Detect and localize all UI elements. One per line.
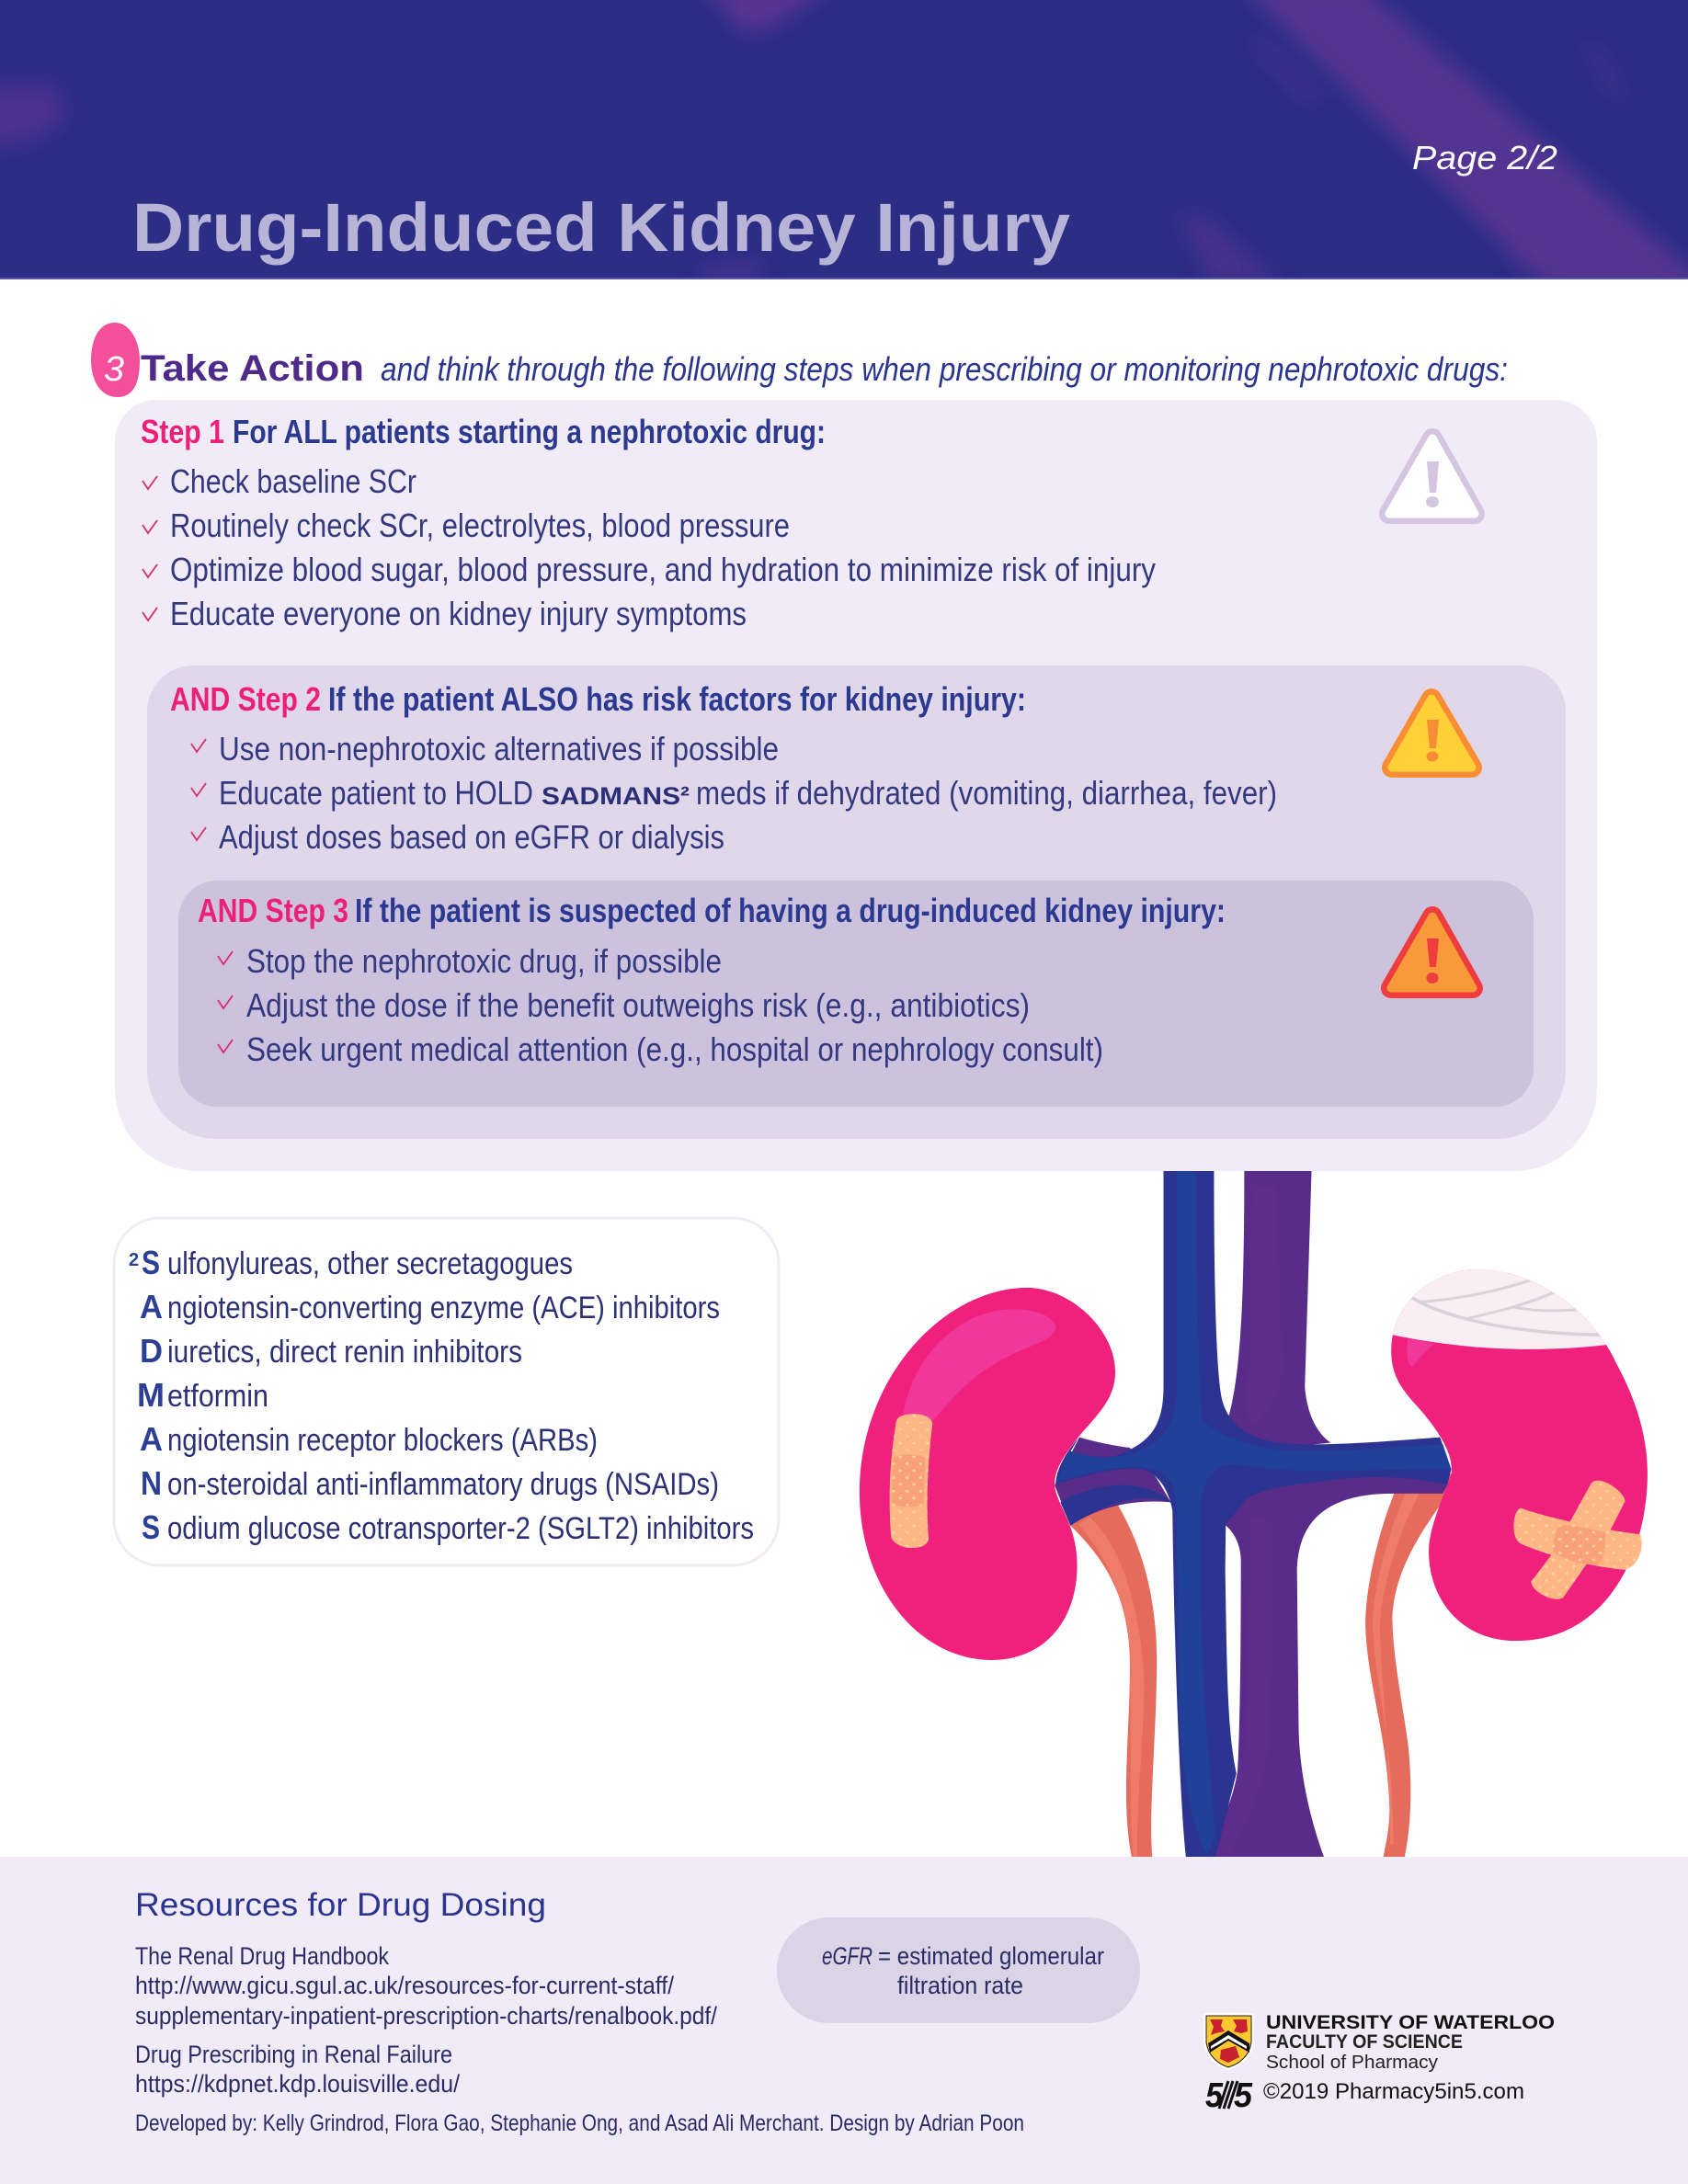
credits: Developed by: Kelly Grindrod, Flora Gao, Stephanie Ong, and Asad Ali Merchant. Design by Adrian Poon: [135, 2110, 1024, 2136]
left kidney: [860, 1288, 1115, 1660]
heading subtitle: and think through the following steps when prescribing or monitoring nephrotoxic drugs:: [381, 350, 1508, 388]
icon: warning yellow: [1392, 699, 1472, 768]
step 2 checklist: Adjust doses based on eGFR or dialysis: [219, 818, 724, 856]
legend line: NSAIDs: on-steroidal anti-inflammatory drugs (NSAIDs): [167, 1467, 719, 1502]
step 3 heading: If the patient is suspected of having a drug-induced kidney injury:: [355, 892, 1226, 929]
resource: drug prescribing: Drug Prescribing in Renal Failure: [135, 2041, 452, 2068]
callout: eGFR definition: [777, 1917, 1140, 2023]
legend line: sulfonylureas: S: [142, 1244, 160, 1281]
logo: pharmacy 5in5: ©2019 Pharmacy5in5.com: [1263, 2079, 1524, 2104]
legend line: ACE inhibitors: A: [140, 1288, 163, 1325]
bandage: left kidney: [890, 1414, 932, 1548]
step 1 checklist: Optimize blood sugar, blood pressure, and hydration to minimize risk of injury: [170, 551, 1156, 588]
logo: university of waterloo: UNIVERSITY OF WATERLOO: [1266, 2012, 1555, 2033]
step 2 checklist: meds if dehydrated (vomiting, diarrhea, fever): [696, 774, 1277, 812]
legend line: sulfonylureas: 2: [129, 1250, 139, 1270]
logo: pharmacy 5in5: 5: [1234, 2076, 1253, 2115]
icon: warning light: [1389, 438, 1475, 514]
logo: university of waterloo: FACULTY OF SCIENCE: [1266, 2031, 1463, 2053]
resource: renal drug handbook: The Renal Drug Handbook: [135, 1942, 389, 1970]
legend line: sulfonylureas: ulfonylureas, other secretagogues: [167, 1246, 573, 1281]
number badge: [91, 323, 140, 397]
logo: university of waterloo: [1203, 2012, 1555, 2073]
gauze wrap: [1393, 1269, 1606, 1349]
arteries: [1055, 1171, 1447, 1857]
panel: step 2: [147, 665, 1566, 1139]
legend line: metformin: etformin: [167, 1379, 268, 1414]
step 2 checklist: [191, 730, 1277, 856]
step 1 heading: Step 1: [141, 413, 224, 450]
step 2 heading: AND Step 2: [170, 680, 321, 718]
section heading: take action: [91, 323, 1508, 397]
legend line: ARBs: A: [140, 1420, 163, 1458]
header banner: [0, 0, 1688, 294]
step 3 checklist: Stop the nephrotoxic drug, if possible: [246, 942, 722, 980]
resource: drug prescribing: [135, 2041, 460, 2098]
legend line: metformin: [137, 1376, 268, 1414]
panel: step 3: [178, 881, 1534, 1107]
panel: step 1: [115, 400, 1597, 1171]
page number: Page 2/2: [1412, 139, 1557, 176]
footer panel: [0, 1857, 1688, 2184]
resource: renal drug handbook: supplementary-inpatient-prescription-charts/renalbook.pdf/: [135, 2002, 717, 2030]
callout: eGFR definition: filtration rate: [897, 1972, 1023, 1999]
resource: renal drug handbook: [135, 1942, 717, 2030]
veins: [1055, 1171, 1451, 1857]
legend line: metformin: M: [137, 1376, 165, 1414]
kidney illustration: [860, 1171, 1648, 1857]
step 2 checklist: SADMANS²: [542, 782, 690, 810]
legend line: diuretics: iuretics, direct renin inhibitors: [167, 1335, 522, 1370]
resource: drug prescribing: https://kdpnet.kdp.louisville.edu/: [135, 2070, 460, 2098]
legend line: NSAIDs: N: [141, 1464, 162, 1502]
bandage cross: right kidney: [1513, 1481, 1642, 1599]
legend line: diuretics: D: [140, 1332, 163, 1370]
step 1 checklist: Educate everyone on kidney injury symptoms: [170, 595, 747, 632]
icon: warning red: [1391, 916, 1473, 988]
step 2 checklist: Educate patient to HOLD: [219, 774, 533, 812]
callout: eGFR definition: = estimated glomerular: [878, 1942, 1104, 1970]
logo: university of waterloo: School of Pharmacy: [1266, 2053, 1438, 2073]
step 2 checklist: Use non-nephrotoxic alternatives if possible: [219, 730, 779, 768]
resources heading: Resources for Drug Dosing: [135, 1887, 546, 1923]
ureters: [1070, 1473, 1451, 1857]
legend line: ACE inhibitors: ngiotensin-converting enzyme (ACE) inhibitors: [167, 1291, 720, 1325]
logo: pharmacy 5in5: 5: [1205, 2076, 1224, 2115]
right kidney: [1391, 1269, 1648, 1642]
logo: pharmacy 5in5: [1205, 2076, 1524, 2115]
step 3 checklist: Seek urgent medical attention (e.g., hospital or nephrology consult): [246, 1030, 1103, 1068]
step 1 heading: For ALL patients starting a nephrotoxic drug:: [233, 413, 826, 450]
icon: shield: [1203, 2013, 1254, 2070]
step 3 checklist: [218, 942, 1103, 1068]
step 3 heading: AND Step 3: [198, 892, 348, 929]
step 2 heading: If the patient ALSO has risk factors for kidney injury:: [328, 680, 1026, 718]
legend line: SGLT2: S: [142, 1508, 160, 1546]
step 1 checklist: [143, 462, 1156, 632]
step 3 checklist: Adjust the dose if the benefit outweighs risk (e.g., antibiotics): [246, 986, 1030, 1024]
heading text: Take Action: [141, 348, 364, 389]
legend line: SGLT2: odium glucose cotransporter-2 (SGLT2) inhibitors: [167, 1511, 754, 1546]
step 1 checklist: Routinely check SCr, electrolytes, blood pressure: [170, 506, 790, 544]
title: Drug-Induced Kidney Injury: [132, 189, 1070, 266]
step 1 checklist: Check baseline SCr: [170, 462, 416, 500]
legend line: ARBs: ngiotensin receptor blockers (ARBs): [167, 1423, 598, 1458]
resource: renal drug handbook: http://www.gicu.sgul.ac.uk/resources-for-current-staff/: [135, 1972, 674, 1999]
panel: SADMANS legend: [114, 1218, 779, 1565]
number badge: 3: [104, 350, 124, 389]
callout: eGFR definition: eGFR: [822, 1942, 873, 1970]
